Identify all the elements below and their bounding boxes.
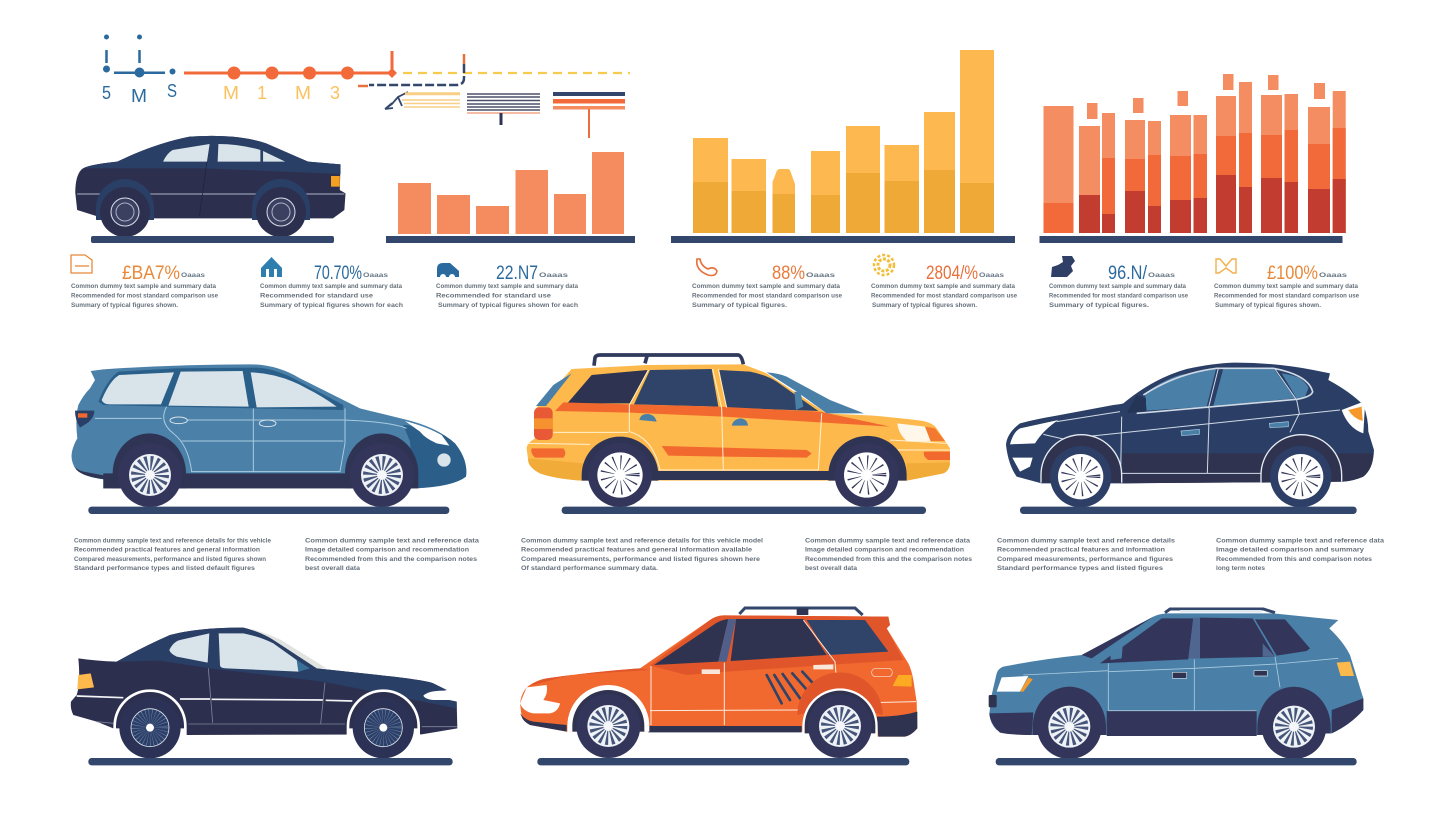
stat unit: Oaaas [806,272,836,279]
paragraph: blue wagon left [74,538,271,572]
timeline: blue markers: 5 [102,83,111,103]
timeline header [102,34,630,138]
yellow wagon wheels [582,436,907,507]
icon: orange box [71,255,92,273]
timeline: yellow labels [223,83,340,103]
dark legend lines [467,94,540,125]
hatchback lower body [1122,453,1373,483]
timeline: yellow labels: 3 [330,83,340,103]
hatchback window frame [1137,368,1313,413]
wagon wheels [113,433,418,507]
orange SUV body [520,615,917,737]
stat description: Common dummy text sample and summary data [260,283,402,290]
blue SUV handles [1172,671,1267,678]
stat description: Summary of typical figures shown for each [260,302,403,309]
stat description: Summary of typical figures. [692,302,787,309]
wagon tail lamp lens [78,413,87,418]
orange SUV fuel flap [872,668,892,677]
blue SUV lower cladding [989,698,1363,736]
stat description [71,283,218,309]
stat description [1049,283,1188,309]
stat block 6 [1049,256,1188,309]
paragraph: yellow wagon right: best overall data [805,565,857,572]
stat value: 2804/% [926,263,978,284]
paragraph: yellow wagon left [521,538,763,572]
stat description: Summary of typical figures shown. [872,302,977,309]
stat description: Recommended for most standard comparison use [1214,292,1359,300]
blue SUV body [989,613,1363,735]
orange SUV handles [702,664,833,674]
stat block 3 [436,263,578,309]
stat unit: Oaaas [181,272,205,279]
yellow wagon indicator [925,427,945,441]
hatchback wheels [1041,435,1342,507]
paragraph: yellow wagon left: Compared measurements, performance and listed figures shown here [521,556,760,563]
red segments [1079,175,1346,233]
paragraph: hatchback left: Recommended practical features and information [997,546,1165,554]
stat description: Common dummy text sample and summary data [436,283,578,290]
paragraph: hatchback right [1216,538,1384,572]
car: navy hatchback [1006,363,1374,514]
blue SUV mirror [1110,646,1123,660]
stat unit: Oaaas [539,272,569,279]
paragraph: blue wagon left: Common dummy sample text and reference details for this vehicle [74,538,271,544]
stat description: Common dummy text sample and summary data [1214,283,1358,290]
timeline: yellow labels: 1 [257,83,267,103]
hatchback trim lines [1043,368,1340,473]
stat unit: Oaaas [1319,272,1348,279]
stat description: Common dummy text sample and summary data [1049,283,1186,290]
stat value: 22.N7 [496,263,538,284]
coupe lower trim [97,668,457,727]
stat value: 96.N/ [1108,263,1148,284]
stat block 7 [1214,259,1359,309]
coupe upper shading [117,628,457,708]
coupe wheels [113,689,420,758]
orange SUV wheels [567,672,883,758]
paragraph: hatchback left: Standard performance types and listed figures [997,565,1164,572]
paragraph: yellow wagon right: Common dummy sample text and reference data [805,538,970,544]
yellow chart baseline [671,236,1015,243]
paragraph: yellow wagon left: Of standard performance summary data. [521,565,658,572]
car: navy sedan [75,136,346,243]
timeline: yellow labels: M [295,83,311,103]
bar chart: orange [386,152,635,243]
yellow wagon lamp lens [534,418,553,429]
paragraph: hatchback left [997,538,1176,572]
timeline: blue markers: S [167,81,177,101]
icon: sun badge [874,255,894,275]
yellow wagon mirror [794,392,803,410]
orange SUV roof rack [739,608,863,615]
icon: car [437,263,459,277]
stat description [692,283,842,309]
stat value: 88% [772,263,805,284]
orange SUV dark trim [520,712,917,737]
stat description: Recommended for most standard comparison use [871,292,1017,300]
blue SUV rack highlight [1180,610,1262,613]
paragraph: blue wagon right: best overall data [305,565,360,572]
orange SUV rack block [797,608,808,615]
stat unit: Oaaas [1148,272,1176,279]
hatchback windows [1145,368,1308,411]
timeline: dashed connectors [358,54,630,86]
coupe headlight [423,691,458,700]
stat description [1214,283,1359,309]
yellow wagon handles [639,414,748,426]
icon: house [261,257,282,277]
stat description: Common dummy text sample and summary data [71,283,216,290]
orange SUV front windows [654,619,827,665]
blue SUV roof rack [1165,609,1275,613]
stat description: Recommended for standard use [260,292,373,300]
coupe windows [169,633,308,672]
paragraph: blue wagon right: Common dummy sample text and reference data [305,538,480,544]
stat description: Common dummy text sample and summary data [871,283,1015,290]
wagon tail lamp [75,411,94,428]
hatchback ground bar [1020,507,1357,514]
blue SUV headlight [997,676,1028,692]
yellow wagon sill [653,471,837,480]
coupe ground bar [88,758,453,765]
yellow wagon roof rack [594,355,743,366]
paragraph: hatchback right: Common dummy sample text and reference data [1216,538,1384,544]
stat description: Common dummy text sample and summary data [692,283,840,290]
blue SUV wheels [1033,687,1331,759]
yellow wagon stripes [555,402,890,458]
stat description: Recommended for most standard comparison use [1049,292,1188,300]
coupe molding [77,696,352,701]
timeline: blue markers: M [131,86,147,106]
stat description [260,283,403,309]
paragraph: blue wagon left: Compared measurements, performance and listed figures shown [74,556,266,563]
stat block 2 [260,257,403,309]
paragraph: blue wagon right: Image detailed comparison and recommendation [305,546,469,554]
blue SUV pillars [1188,618,1275,658]
stat description [436,283,578,309]
yellow wagon lower shading [528,458,950,481]
wagon window frame [98,368,343,410]
stat description: Summary of typical figures. [1049,302,1149,309]
hatchback mirror [1127,395,1146,413]
yellow legend lines [402,94,460,107]
blue SUV rear lamp [1337,662,1354,676]
stat value: £BA7% [122,263,180,284]
stat block 5 [871,255,1017,309]
orange SUV pillar [718,619,736,662]
bar chart: yellow stacked [671,50,1015,243]
orange SUV top shading [530,615,903,686]
upper yellow bars [693,50,994,233]
lower amber bars [693,170,994,233]
sedan ground bar [91,236,334,243]
orange SUV headlight [520,685,560,713]
coupe mirror [297,660,310,672]
stat value: £100% [1267,263,1318,284]
paragraph: yellow wagon right: Image detailed comparison and recommendation [805,546,964,554]
red chart baseline [1040,236,1342,243]
yellow wagon body [527,364,950,481]
paragraph: blue wagon right: Recommended from this and the comparison notes [305,556,477,563]
wagon door handles [170,417,276,427]
hatchback headlight [1010,420,1058,444]
wagon fog lamp [437,453,451,467]
stat description: Recommended for most standard comparison use [692,292,842,300]
wagon ground bar [88,507,449,514]
stat block 1 [71,255,218,309]
orange bars [398,152,624,234]
wagon body [72,364,466,488]
light orange segments [1044,74,1346,233]
timeline: orange line [184,51,397,80]
hatchback body [1006,363,1374,483]
sedan body [75,136,346,218]
paragraph: yellow wagon right: Recommended from this and the comparison notes [805,556,972,563]
paragraph: yellow wagon left: Common dummy sample text and reference details for this vehicle model [521,538,763,544]
orange SUV rear glass [807,620,888,655]
icon: envelope [1216,259,1236,273]
timeline: blue markers [102,34,177,106]
yellow wagon headlight [897,423,931,442]
stat description: Summary of typical figures shown. [71,302,178,309]
coupe body [71,628,457,735]
yellow wagon rear glass [536,373,572,406]
blue SUV grille [989,695,997,707]
stat description: Recommended for standard use [436,292,552,300]
orange SUV lines [650,620,916,725]
paragraph: hatchback right: Image detailed comparison and summary [1216,546,1365,554]
wagon underbody [73,465,413,488]
blue SUV windows [1082,617,1310,663]
wagon headlight [405,421,449,446]
paragraph: blue wagon right [305,538,480,572]
paragraph: blue wagon left: Standard performance types and listed default figures [74,565,255,572]
hatchback lamp lens [1348,407,1363,421]
bar chart: red stacked [1040,74,1346,243]
stat description: Summary of typical figures shown for each [438,302,578,309]
stat unit: Oaaas [363,272,388,279]
blue SUV indicator [1020,677,1033,692]
paragraph: hatchback right: long term notes [1216,565,1265,572]
paragraph: hatchback left: Compared measurements, performance and figures [997,556,1173,563]
yellow wagon windshield [767,372,864,413]
paragraph: hatchback left: Common dummy sample text and reference details [997,538,1176,544]
stat description [871,283,1017,309]
yellow wagon tail lamp [534,407,553,440]
stat description: Recommended for most standard comparison use [71,292,218,300]
stat value: 70.70% [314,263,362,284]
blue SUV lines [1023,657,1338,711]
wagon windows [102,371,337,407]
icon: navy figure [1051,256,1075,277]
paragraph: blue wagon left: Recommended practical features and general information [74,546,260,554]
orange chart baseline [386,236,635,243]
wagon body lines [95,407,407,472]
timeline: yellow labels: M [223,83,239,103]
car: blue SUV [989,609,1363,765]
paragraph: hatchback right: Recommended from this and comparison notes [1216,556,1372,563]
orange SUV slashes [767,672,817,703]
stat block 4 [692,259,842,309]
icon: phone [697,259,717,276]
yellow wagon reflectors [531,448,950,460]
color legend bars [553,92,625,138]
blue SUV ground bar [996,758,1357,765]
coupe windshield strip [250,628,327,668]
orange segments [1044,128,1346,233]
yellow wagon lines [527,369,950,470]
orange SUV lamp [893,675,912,687]
icon: arrow [385,92,408,109]
yellow wagon side glass [634,369,818,411]
hatchback tail lamp [1342,402,1365,433]
car: black coupe [71,628,458,765]
hatchback handles [1181,422,1288,436]
paragraph: yellow wagon left: Recommended practical features and general information available [521,546,752,554]
paragraph: yellow wagon right [805,538,972,572]
sedan wheels [96,179,310,237]
yellow wagon ground bar [562,507,926,514]
stat unit: Oaaas [979,272,1004,279]
car: blue wagon [72,364,466,514]
wagon front shading [403,425,466,488]
coupe tail lamp [77,673,94,689]
orange SUV ground bar [537,758,909,765]
car: orange SUV [520,608,917,765]
hatchback fog lamp [1012,458,1033,472]
yellow wagon windows [567,370,648,403]
stat description: Summary of typical figures shown. [1215,302,1321,309]
car: yellow wagon [527,355,950,514]
